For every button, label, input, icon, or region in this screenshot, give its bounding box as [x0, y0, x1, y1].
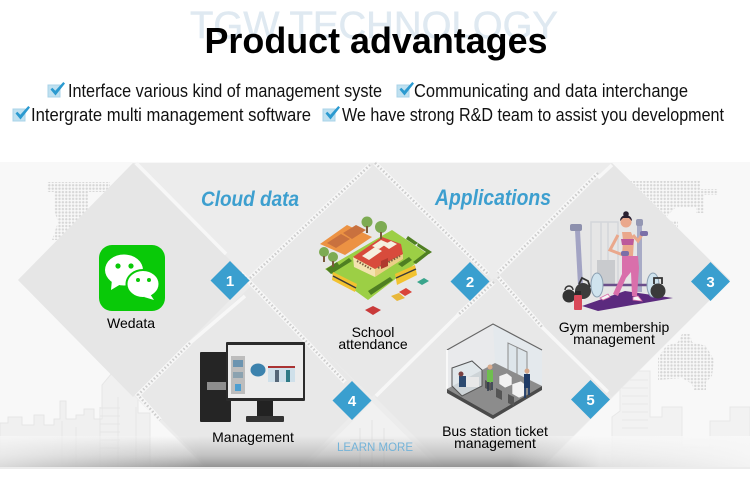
- buses and cars: [332, 272, 357, 292]
- heading: Cloud data: Cloud data: [201, 188, 299, 211]
- world map dots right: [628, 181, 718, 247]
- label: Gym membership management: Gym membership: [559, 319, 669, 335]
- ticket booth: [452, 361, 482, 396]
- tile separator lines: [136, 163, 612, 420]
- badge 5: 5: [586, 392, 595, 409]
- illustration: computer: [200, 342, 305, 422]
- city skyline right: [612, 371, 750, 467]
- trees: [362, 216, 372, 228]
- kettlebells: [562, 290, 576, 302]
- label: Gym membership management: management: [573, 331, 655, 347]
- skyline gap between lower tiles: [306, 402, 438, 467]
- label: Bus station ticket management: Bus station ticket: [442, 423, 548, 439]
- illustration: gym: [562, 211, 673, 311]
- link: LEARN MORE: LEARN MORE: [337, 442, 413, 454]
- tile: top row diamonds: [18, 163, 250, 397]
- woman: [620, 216, 632, 228]
- city skyline left: [0, 373, 150, 467]
- badge 1: [210, 261, 250, 300]
- walls: [447, 324, 495, 389]
- mat: [582, 291, 673, 311]
- world map dots left: [28, 182, 110, 240]
- feature list: [13, 81, 724, 125]
- icon: WeChat: [99, 245, 165, 311]
- feature 3: Intergrate multi management software: [31, 105, 311, 125]
- courts: [320, 225, 372, 255]
- label: Wedata: Wedata: [107, 315, 155, 331]
- badge 1: 1: [226, 273, 234, 290]
- hedges: [326, 236, 432, 295]
- illustration: bus station: [447, 324, 542, 419]
- title: Product advantages: [204, 20, 548, 61]
- feature 1: Interface various kind of management syste: [68, 81, 382, 101]
- badge 3: 3: [706, 274, 715, 291]
- bottle: [574, 295, 582, 310]
- gates: [485, 380, 514, 406]
- label: Bus station ticket management: management: [454, 435, 536, 451]
- heading: Applications: Applications: [434, 185, 551, 210]
- passengers: [487, 370, 493, 382]
- badge 2: [450, 262, 490, 301]
- racks: [575, 230, 583, 285]
- bottom fade shadow: [0, 436, 750, 467]
- machine frame: [591, 222, 618, 288]
- badge 5: [571, 380, 610, 419]
- central grey field: [18, 163, 730, 467]
- barbell: [597, 284, 653, 286]
- map dots: lower right: [658, 334, 714, 390]
- badge 2: 2: [466, 274, 474, 291]
- feature 2: Communicating and data interchange: [414, 81, 688, 101]
- background watermark: TGW TECHNOLOGY: TGW TECHNOLOGY: [190, 5, 558, 47]
- label: Management: Management: [212, 429, 294, 445]
- label: School attendance: attendance: [338, 336, 408, 352]
- badge 4: [332, 381, 372, 420]
- lawn: [325, 230, 428, 300]
- illustration: school: [319, 216, 432, 315]
- school building: [353, 257, 375, 277]
- panel: background band: [0, 162, 750, 469]
- label: School attendance: School: [352, 324, 394, 340]
- door frames: [508, 343, 527, 384]
- floor: [447, 363, 542, 415]
- tile: lower diamonds: [138, 282, 370, 467]
- badge 4: 4: [348, 393, 357, 410]
- badge 3: [691, 262, 730, 301]
